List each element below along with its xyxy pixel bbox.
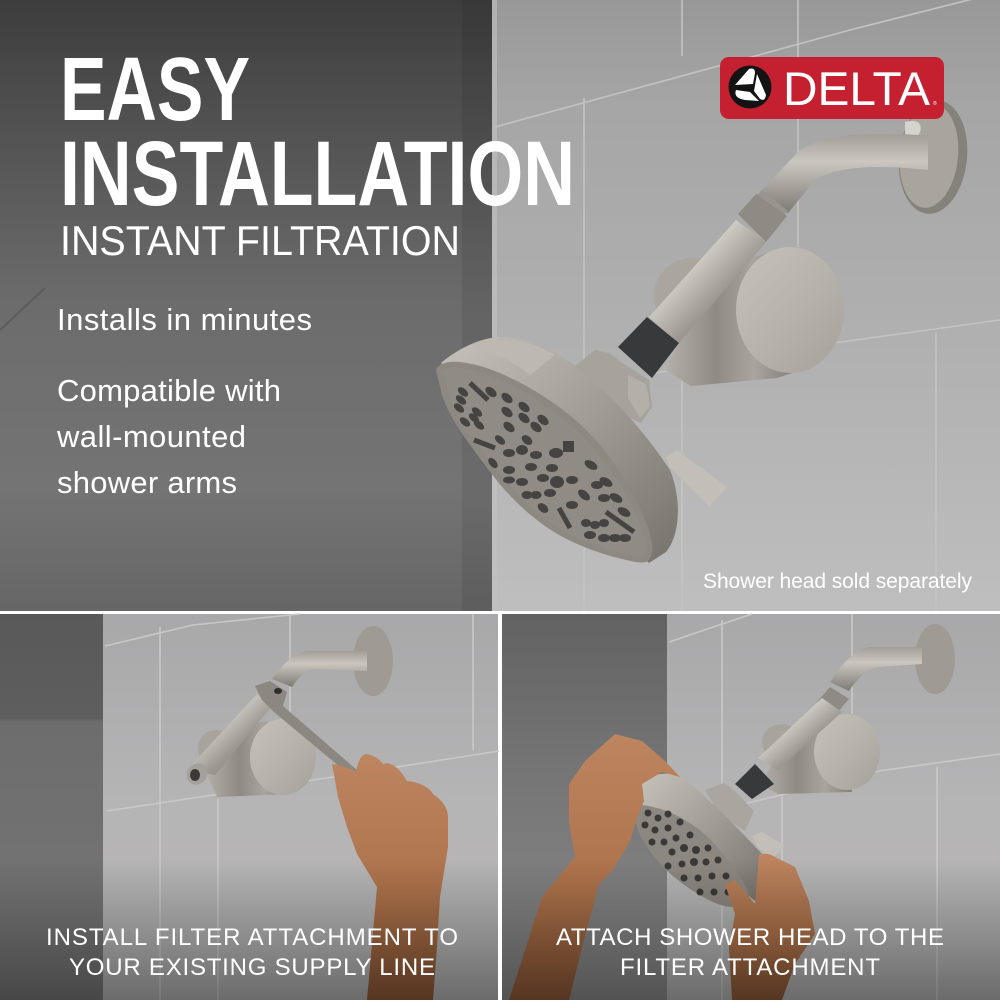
feature text: Compatible with bbox=[57, 373, 281, 408]
logo: Delta: ® bbox=[933, 100, 937, 107]
disclaimer: Shower head sold separately bbox=[703, 570, 972, 593]
panel: step 2 bbox=[502, 614, 1000, 1000]
dark wall section bbox=[0, 0, 497, 611]
caption: FILTER ATTACHMENT bbox=[620, 954, 880, 981]
nozzle holes bbox=[642, 810, 742, 896]
shower arm and flange bbox=[738, 97, 973, 242]
logo: Delta bbox=[720, 57, 944, 119]
feature text: shower arms bbox=[57, 465, 237, 500]
caption: INSTALL FILTER ATTACHMENT TO bbox=[46, 924, 458, 951]
title: INSTALLATION bbox=[60, 123, 575, 225]
feature text: Installs in minutes bbox=[57, 302, 312, 337]
icon: hands bbox=[509, 734, 815, 1000]
long tube bbox=[649, 220, 766, 343]
title bbox=[60, 40, 575, 225]
feature text: wall-mounted bbox=[56, 419, 246, 454]
icon: Delta triangle bbox=[728, 66, 772, 108]
caption: YOUR EXISTING SUPPLY LINE bbox=[69, 954, 435, 981]
subtitle: INSTANT FILTRATION bbox=[60, 217, 460, 264]
arm and filter bbox=[735, 624, 955, 799]
arm and filter bbox=[182, 626, 393, 797]
caption bbox=[556, 924, 944, 981]
panel: step 1 bbox=[0, 614, 499, 1000]
title: EASY bbox=[60, 40, 250, 140]
spray handle bbox=[752, 832, 785, 857]
filter attachment bbox=[618, 220, 844, 386]
feature text bbox=[56, 302, 312, 500]
nozzle holes bbox=[452, 383, 634, 542]
wrench bbox=[255, 681, 357, 778]
black connector bbox=[618, 317, 679, 378]
icon: hand bbox=[332, 754, 448, 1000]
caption: ATTACH SHOWER HEAD TO THE bbox=[556, 924, 944, 951]
spray handle bbox=[666, 450, 727, 507]
shower head bbox=[436, 337, 727, 563]
panel: hero photo bbox=[0, 0, 1000, 611]
logo: Delta: DELTA bbox=[783, 62, 931, 115]
shower head bbox=[635, 774, 785, 907]
caption bbox=[46, 924, 458, 981]
